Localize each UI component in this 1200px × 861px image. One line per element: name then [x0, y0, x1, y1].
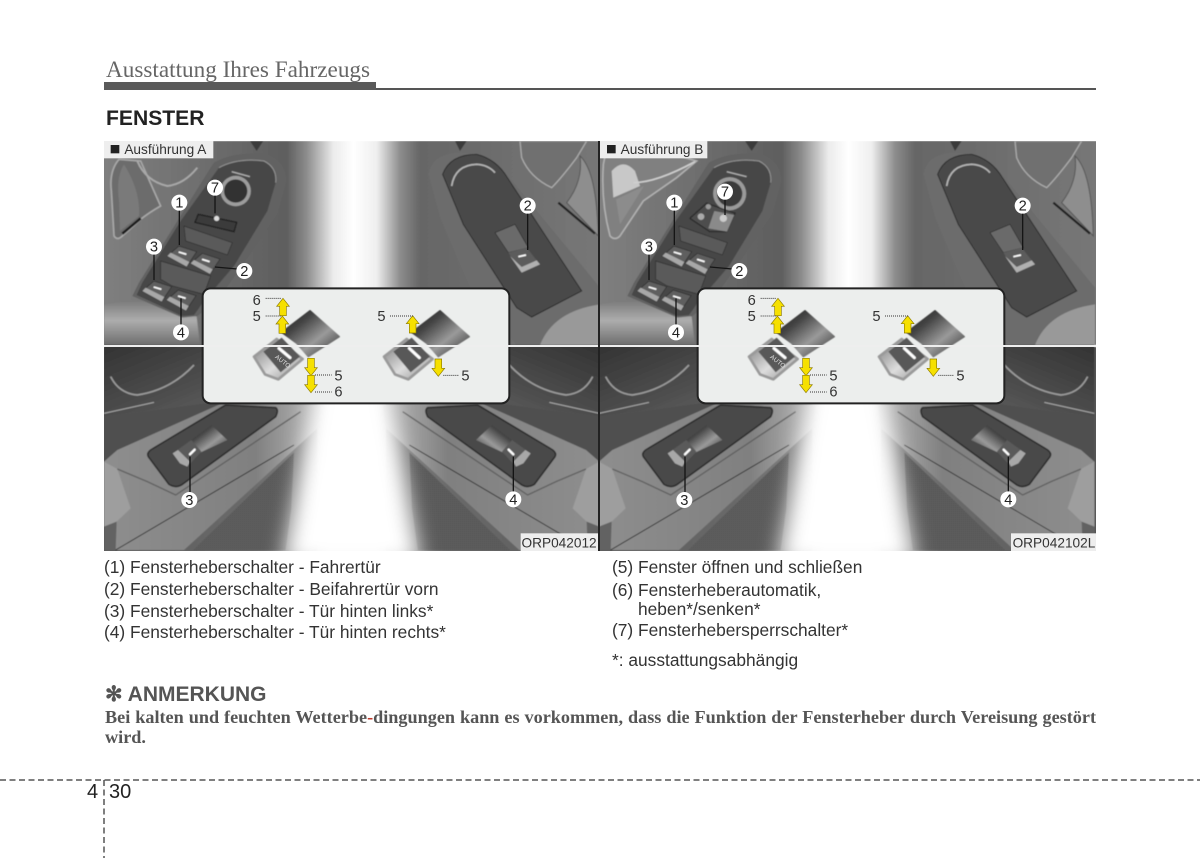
legend: right column — [612, 557, 862, 670]
callout: switch positions B: 5 — [748, 309, 756, 325]
callout: switch positions A: 5 — [461, 368, 469, 384]
icon: mirror knob and switches B — [690, 172, 747, 232]
number markers A: 1 — [175, 196, 183, 212]
icon: door handle B — [603, 148, 697, 238]
legend: left column — [104, 557, 446, 642]
note body — [105, 707, 1096, 746]
panel: Ausführung B — [595, 141, 1098, 565]
label: Ausführung A: Ausführung A — [124, 142, 207, 157]
callout: switch positions B: 6 — [748, 293, 756, 309]
callout: switch positions B: 5 — [872, 309, 880, 325]
section title: FENSTER — [106, 107, 204, 130]
note body: Bei kalten und feuchten Wetterbe-dingungen kann es vorkommen, dass die Funktion der Fensterheber durch Vereisung gestört — [105, 707, 1096, 727]
callout: switch positions B: AUTO — [768, 354, 787, 370]
callout: switch positions B — [698, 288, 1004, 403]
callout: switch positions A: 6 — [334, 385, 342, 401]
number markers B: 1 — [670, 196, 678, 212]
note body: wird. — [105, 726, 146, 746]
header rule — [104, 82, 1096, 90]
label: Ausführung B — [600, 141, 707, 158]
panel: Ausführung A — [100, 141, 603, 565]
number markers A: 4 — [509, 492, 517, 508]
legend: right column: (5) Fenster öffnen und schließen — [612, 557, 862, 577]
callout: switch positions A — [203, 288, 509, 403]
number markers A — [146, 180, 536, 509]
legend: right column: *: ausstattungsabhängig — [612, 650, 798, 670]
callout: switch positions B: 6 — [829, 385, 837, 401]
callout: switch positions B: 5 — [829, 368, 837, 384]
callout: switch positions A: AUTO — [273, 354, 292, 370]
number markers B: 2 — [1019, 199, 1027, 215]
number markers A: 3 — [150, 240, 158, 256]
leader lines — [649, 200, 1023, 492]
note heading: ✻ ANMERKUNG — [105, 683, 266, 706]
footer dashed rules — [0, 780, 1200, 858]
number markers B: 4 — [672, 325, 680, 341]
running header: Ausstattung Ihres Fahrzeugs — [106, 57, 370, 83]
icon: door handle A — [111, 159, 197, 238]
legend: left column: (1) Fensterheberschalter - Fahrertür — [104, 557, 381, 577]
photo: door switches A — [100, 141, 603, 565]
legend: left column: (2) Fensterheberschalter - Beifahrertür vorn — [104, 579, 438, 599]
callout: switch positions A: 6 — [253, 293, 261, 309]
callout: switch positions A: 5 — [334, 368, 342, 384]
legend: right column: (6) Fensterheberautomatik, — [612, 580, 821, 600]
number markers A: 2 — [524, 199, 532, 215]
number markers A: 4 — [177, 325, 185, 341]
callout: switch positions A: 5 — [377, 309, 385, 325]
page number: page: 30 — [109, 781, 131, 803]
page number: chapter: 4 — [87, 781, 98, 803]
number markers A: 2 — [240, 264, 248, 280]
label: Ausführung A — [104, 141, 213, 158]
icon: mirror knob and lock switch A — [195, 172, 251, 232]
callout: switch positions B: 5 — [956, 368, 964, 384]
legend: right column: (7) Fensterhebersperrschalter* — [612, 620, 848, 640]
number markers B: 7 — [721, 185, 729, 201]
number markers A: 3 — [185, 493, 193, 509]
photo: door switches B — [595, 141, 1098, 565]
number markers B: 3 — [645, 240, 653, 256]
image code B: ORP042102L — [1013, 535, 1096, 550]
image code A: ORP042012 — [521, 535, 597, 550]
legend: left column: (4) Fensterheberschalter - Tür hinten rechts* — [104, 622, 446, 642]
number markers A: 7 — [211, 181, 219, 197]
number markers B: 2 — [735, 264, 743, 280]
number markers B: 4 — [1004, 492, 1012, 508]
legend: right column: heben*/senken* — [638, 599, 760, 619]
number markers B: 3 — [680, 493, 688, 509]
number markers B — [641, 184, 1031, 509]
leader lines — [154, 195, 528, 492]
label: Ausführung B: Ausführung B — [621, 142, 703, 157]
callout: switch positions A: 5 — [253, 309, 261, 325]
legend: left column: (3) Fensterheberschalter - Tür hinten links* — [104, 601, 433, 621]
